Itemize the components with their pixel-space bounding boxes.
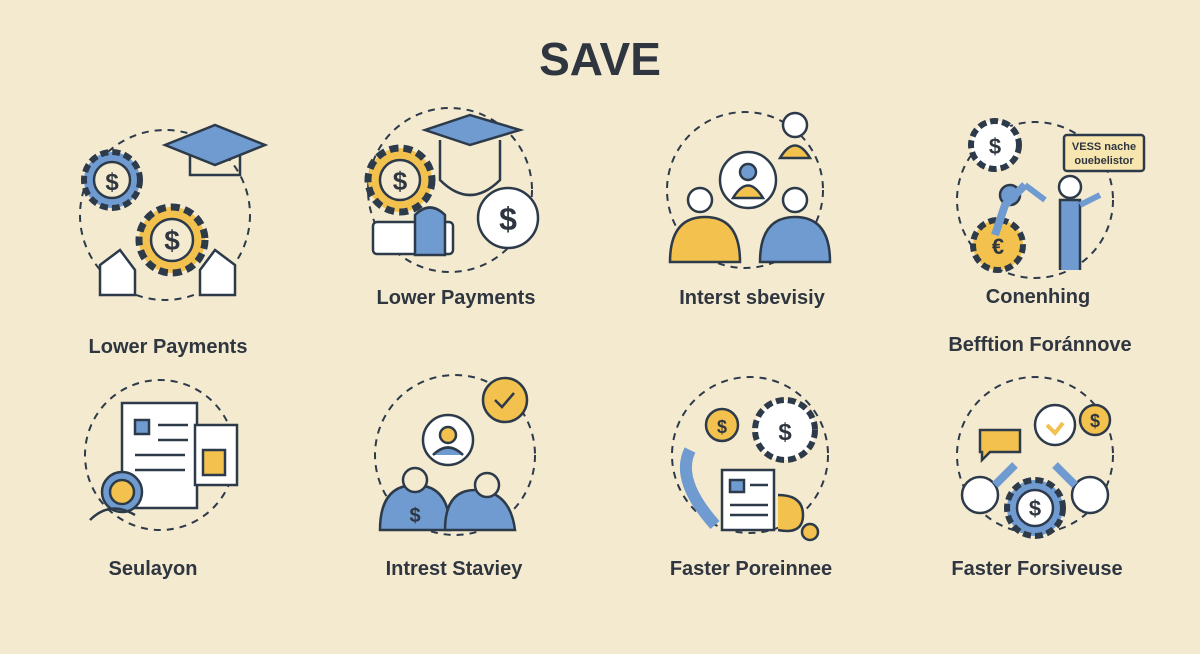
text: $ xyxy=(989,134,1001,159)
icon: grad cap xyxy=(165,125,265,175)
panel: lower payments 2 xyxy=(368,108,538,272)
label 5: Befftion Foránnove xyxy=(948,334,1132,356)
text: $ xyxy=(105,169,119,196)
panel: seulayon xyxy=(85,380,237,530)
panel: lower payments 1 xyxy=(80,125,265,300)
title: SAVE xyxy=(539,33,661,85)
text: $ xyxy=(393,166,408,196)
label 7: Intrest Staviey xyxy=(386,558,523,580)
text: $ xyxy=(164,225,180,256)
label 2: Lower Payments xyxy=(377,287,535,309)
label 6: Seulayon xyxy=(109,558,197,580)
text: $ xyxy=(499,201,517,237)
panel: consolidation xyxy=(957,121,1144,278)
label 4: Conenhing xyxy=(986,286,1090,308)
dashed circle 1 xyxy=(80,130,250,300)
panel: interest subsidy xyxy=(667,112,830,268)
panel: faster forgiveness 2 xyxy=(957,377,1113,536)
text: € xyxy=(992,234,1004,259)
text: $ xyxy=(1090,411,1100,431)
label 8: Faster Poreinnee xyxy=(670,558,832,580)
icon: gear yellow xyxy=(139,207,205,273)
label 9: Faster Forsiveuse xyxy=(951,558,1123,580)
panel: interest strategy xyxy=(375,375,535,535)
text: $ xyxy=(778,419,792,446)
panel: faster forgiveness 1 xyxy=(672,377,828,540)
text: ouebelistor xyxy=(1074,155,1134,167)
icon: gear blue xyxy=(84,152,140,208)
text: $ xyxy=(717,417,727,437)
label 1: Lower Payments xyxy=(89,336,247,358)
text: VESS nache xyxy=(1072,141,1136,153)
icon: hands xyxy=(100,250,235,295)
text: $ xyxy=(409,505,421,527)
text: $ xyxy=(1029,496,1041,521)
label 3: Interst sbevisiy xyxy=(679,287,826,309)
